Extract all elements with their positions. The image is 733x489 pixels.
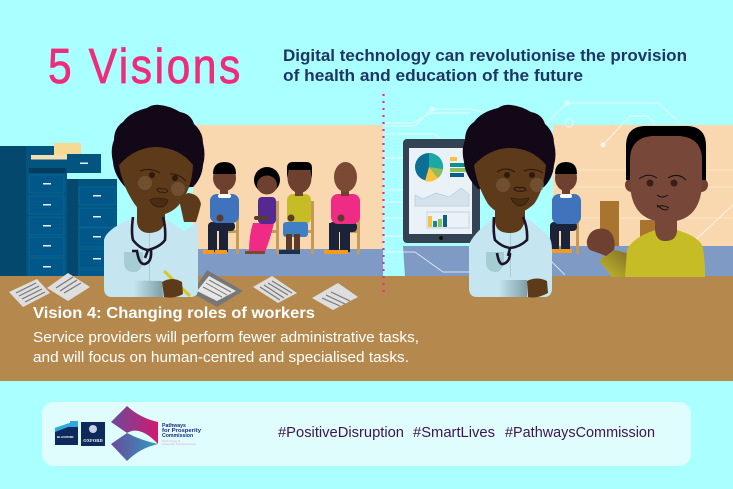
logo: University of Oxford [81,422,105,446]
right patient in blue [550,162,581,254]
subtitle: of health and education of the future [283,67,583,85]
neck [137,200,165,233]
hair [463,105,556,189]
face [474,148,546,215]
forearm [599,250,632,277]
pocket [124,252,143,272]
papers on desk [9,273,358,310]
close-up patient in yellow [587,126,708,277]
logo: Pathways wordmark: Commission [162,433,193,439]
vision description: Service providers will perform fewer administrative tasks, [33,330,419,346]
writing hand [162,279,183,298]
sleeve [470,280,527,297]
face [630,136,702,222]
logo: Blavatnik School of Government [55,421,78,445]
hair [112,105,204,189]
hashtags: #SmartLives [413,425,495,441]
face [119,147,193,216]
pocket [486,252,504,272]
vision description: and will focus on human-centred and specialised tasks. [33,350,409,366]
neck [495,200,525,233]
desk [0,276,733,381]
patient: pink sweater [324,162,360,254]
hashtags [278,425,655,441]
logo: Pathways wordmark: Technology & [162,439,180,443]
doctor left [104,105,204,298]
subtitle: Digital technology can revolutionise the provision [283,47,687,65]
shirt [625,230,705,277]
hair [626,126,706,180]
panel: right room background [403,125,733,277]
vision description [33,330,419,366]
logo: Pathways wordmark: for Prosperity [162,428,201,434]
logo: University of Oxford: OXFORD [83,438,103,443]
circuit lines [385,101,733,275]
panel: footer [42,402,691,466]
subtitle [283,47,687,85]
vision heading: Vision 4: Changing roles of workers [33,305,315,322]
clipboard [192,270,243,307]
pencil [164,271,190,296]
title: 5 Visions [48,38,243,94]
divider dotted line [382,94,385,297]
stethoscope [494,217,527,264]
patient: yellow sweater [279,162,314,254]
hashtags: #PathwaysCommission [505,425,655,441]
patient: purple top and pink skirt [245,167,280,254]
logo: Pathways mark [111,406,158,461]
waiting patients [203,162,360,254]
ears [625,178,639,192]
logo: Blavatnik School of Government: BLAVATNIK [57,435,74,439]
filing cabinets [0,143,117,277]
fist [587,229,615,256]
stethoscope [132,217,165,264]
raised fist [180,193,201,222]
hand [527,278,548,298]
sleeve [104,280,163,297]
logo: Pathways wordmark: Pathways [162,423,186,429]
hashtags: #PositiveDisruption [278,425,404,441]
empty chairs [600,201,656,246]
panel: left waiting room background [193,125,383,277]
patient: blue sweater [203,162,239,254]
doctor right [463,105,556,298]
coat [469,218,552,297]
tablet dashboard [403,139,480,243]
neck [655,215,677,241]
logo: Pathways wordmark [162,423,201,446]
logo: Pathways wordmark: Inclusive Development [162,442,196,446]
coat [104,218,198,297]
